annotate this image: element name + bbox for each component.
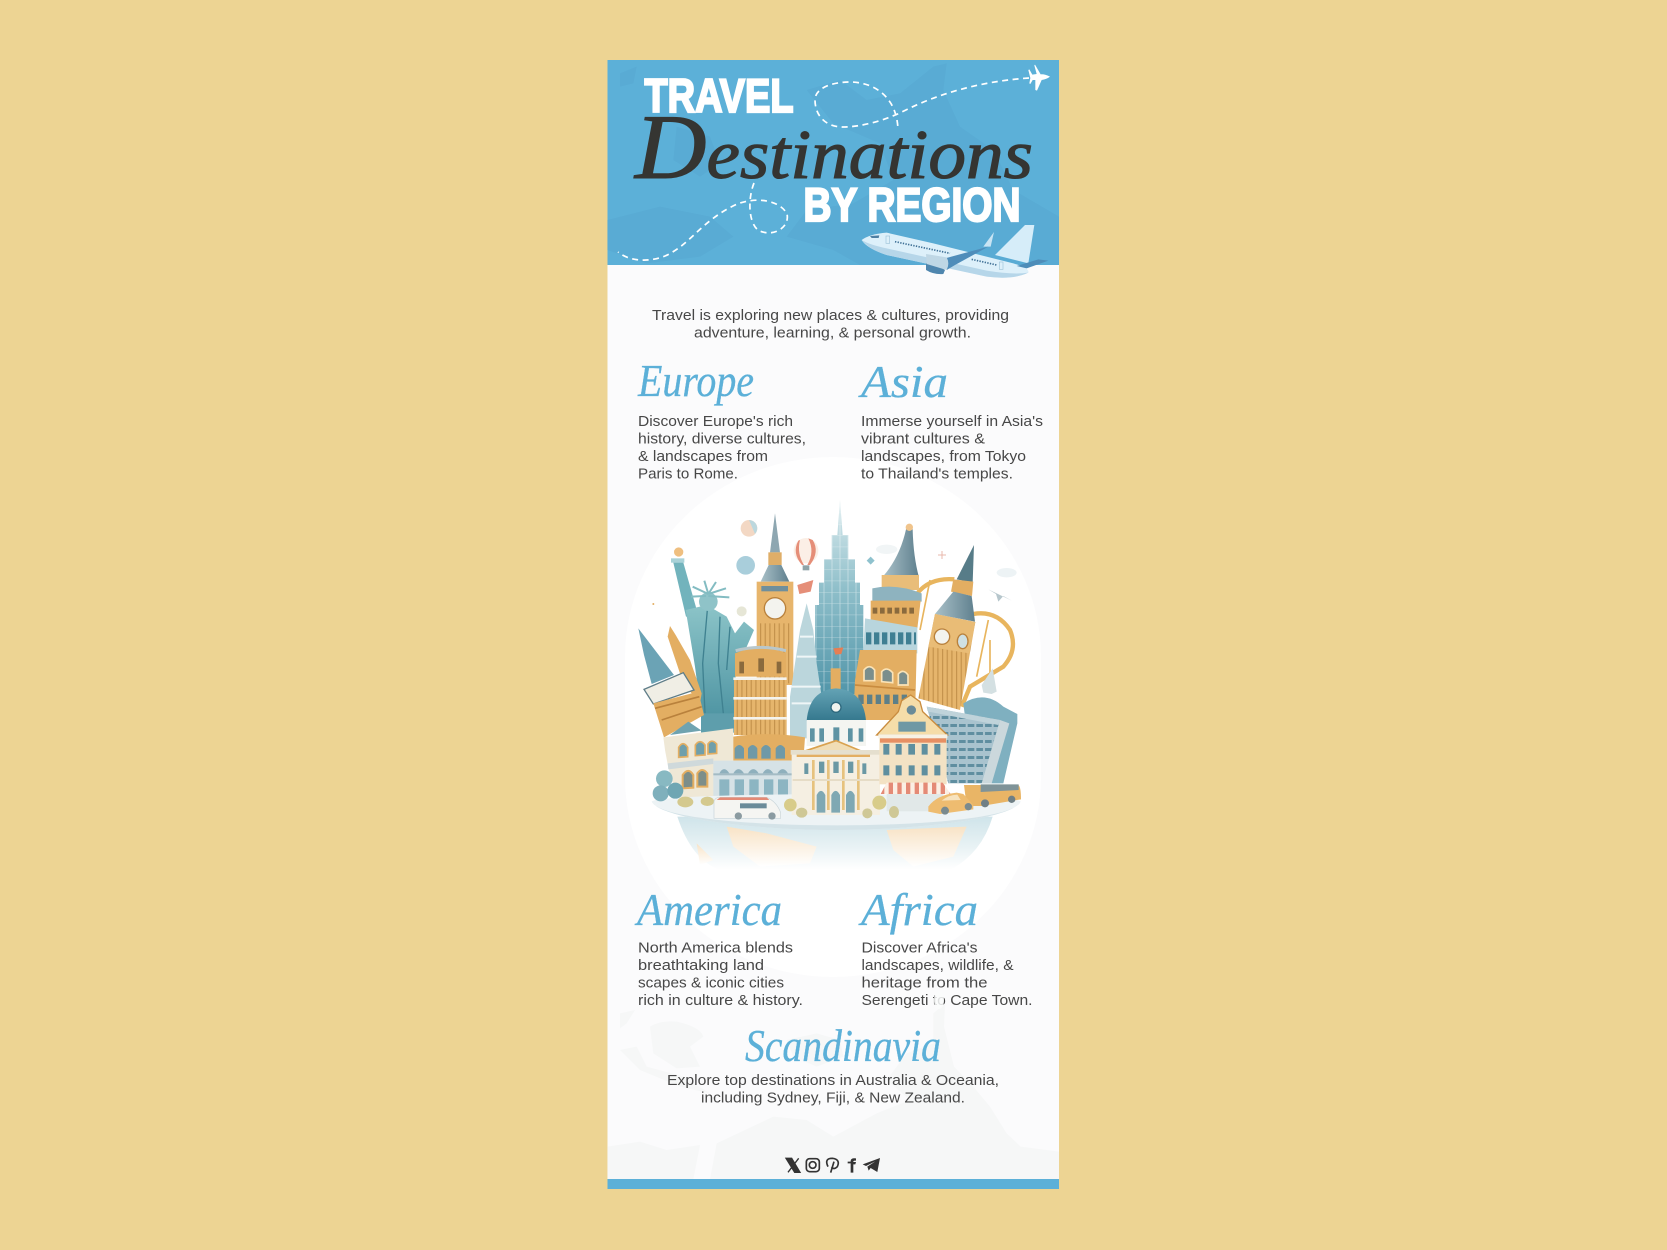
body: Africa: [862, 940, 1032, 1009]
globe: [677, 817, 993, 870]
body: Scandinavia: Explore top destinations in Australia & Oceania,: [667, 1072, 999, 1089]
heading: Africa: Africa: [858, 885, 978, 935]
orange house: [877, 695, 951, 811]
body: Scandinavia: including Sydney, Fiji, & New Zealand.: [701, 1090, 965, 1107]
panel: infographic card: [607, 265, 1059, 1179]
central domed palace: [791, 668, 881, 815]
icon: large passenger airplane: [862, 225, 1048, 278]
section: Scandinavia: [667, 1021, 999, 1107]
body: Europe: Paris to Rome.: [638, 465, 738, 482]
body: Asia: Immerse yourself in Asia's: [861, 413, 1043, 430]
title: BY REGION: BY REGION: [804, 178, 1020, 231]
right glass building: [927, 668, 1017, 783]
heading: America: America: [634, 885, 782, 935]
central gold tower: [718, 647, 805, 761]
car: [928, 793, 973, 815]
body: America: North America blends: [638, 940, 793, 957]
icon: small white airplane: [1028, 65, 1050, 91]
icon: X: [786, 1158, 800, 1172]
icon: Instagram: [806, 1159, 819, 1172]
dashed flight path: top loop: [815, 78, 1029, 130]
title: TRAVEL: TRAVEL: [644, 69, 794, 122]
body: Asia: to Thailand's temples.: [861, 465, 1013, 482]
panel: header banner: [607, 60, 1059, 265]
section: America: [634, 885, 803, 1009]
illustration: city landmarks on a globe: [638, 500, 1021, 870]
body: Asia: [861, 413, 1043, 482]
thin white tower: [790, 580, 822, 738]
intro text: Travel is exploring new places & cultures, providing: [652, 307, 1009, 324]
social icons: [786, 1158, 880, 1173]
platform: [652, 794, 1021, 830]
white circle behind city illustration: [625, 457, 1041, 977]
section: Europe: [637, 356, 806, 482]
sky: balloon, orbs, small icons: [652, 520, 1017, 616]
body: Africa: heritage from the: [862, 975, 988, 992]
clock tower right: [918, 545, 975, 710]
statue of liberty: [671, 547, 754, 733]
intro text: adventure, learning, & personal growth.: [694, 324, 971, 342]
body: America: rich in culture & history.: [638, 992, 803, 1009]
bus: [964, 784, 1021, 807]
body: Asia: landscapes, from Tokyo: [861, 448, 1026, 465]
intro text: [652, 307, 1009, 342]
heading: Asia: Asia: [858, 357, 948, 407]
heading: Europe: Europe: [637, 356, 754, 406]
heading: Scandinavia: Scandinavia: [745, 1021, 941, 1071]
section: Africa: [858, 885, 1032, 1009]
body: Africa: Serengeti to Cape Town.: [862, 992, 1032, 1009]
title: Destinations: Destinations: [633, 96, 1033, 198]
dashed flight path: bottom: [618, 183, 787, 260]
body: America: [638, 940, 803, 1009]
arcade building: [713, 761, 792, 801]
left tower and eiffel section: [638, 626, 704, 737]
body: Europe: history, diverse cultures,: [638, 430, 806, 447]
body: Europe: & landscapes from: [638, 448, 768, 465]
body: Scandinavia: [667, 1072, 999, 1107]
skyscraper: [815, 500, 863, 698]
trees and bushes: [653, 770, 899, 818]
icon: Facebook: [848, 1158, 856, 1173]
body: America: breathtaking land: [638, 957, 764, 974]
bottom bar: [608, 1179, 1059, 1189]
icon: Pinterest: [827, 1158, 838, 1173]
van: [714, 797, 781, 820]
clock tower left: [757, 513, 793, 685]
body: Asia: vibrant cultures &: [861, 430, 985, 447]
body: Africa: Discover Africa's: [862, 940, 978, 957]
colosseum: [663, 722, 733, 800]
header map watermark: [607, 220, 608, 250]
body: America: scapes & iconic cities: [638, 975, 784, 992]
leaning domed tower: [853, 524, 922, 720]
ferris wheel: [917, 579, 1013, 707]
world map watermark: [607, 1146, 608, 1179]
section: Asia: [858, 357, 1043, 482]
body: Europe: Discover Europe's rich: [638, 413, 793, 430]
body: Africa: landscapes, wildlife, &: [862, 957, 1014, 974]
body: Europe: [638, 413, 806, 482]
icon: Telegram: [863, 1158, 880, 1172]
